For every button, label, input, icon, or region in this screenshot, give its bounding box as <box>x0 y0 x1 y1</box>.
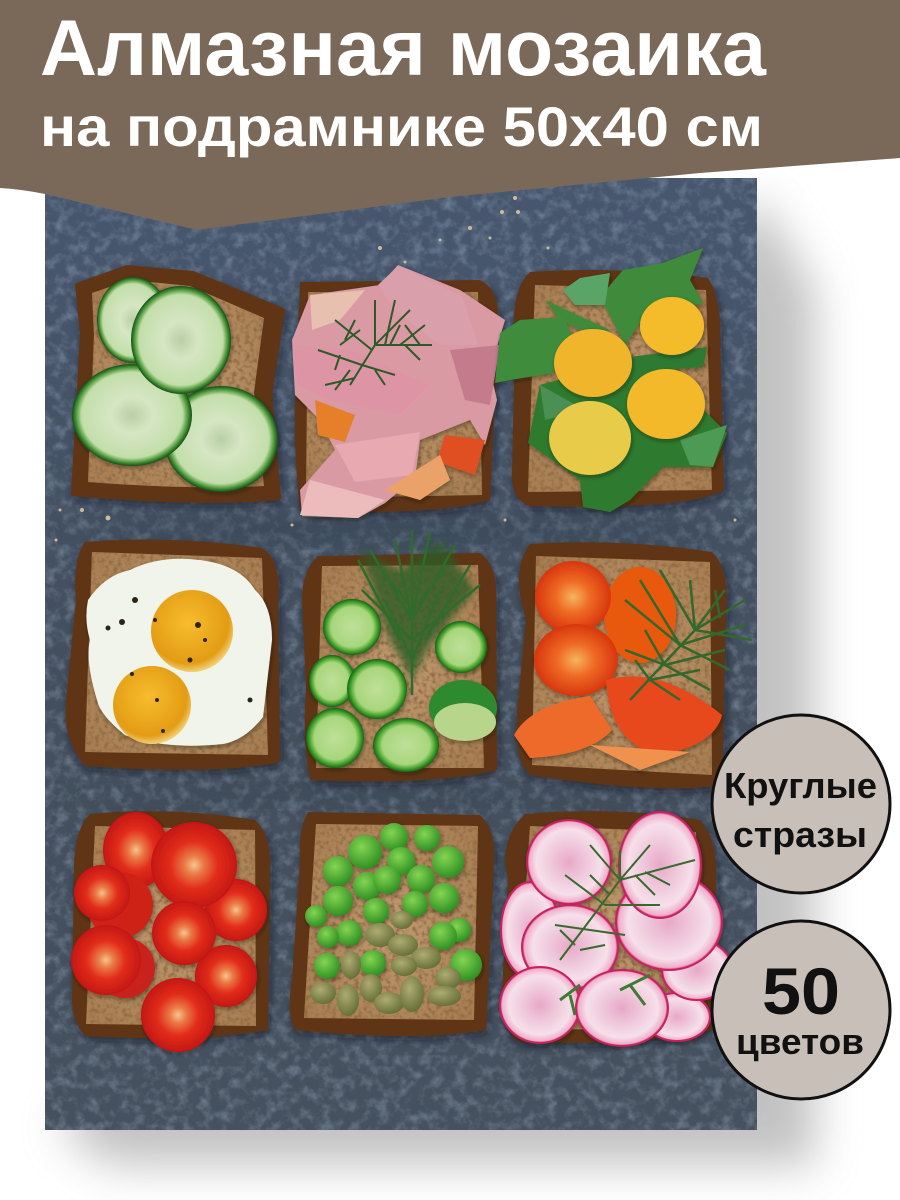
radish slices <box>500 812 732 1046</box>
canvas: slate background <box>45 178 757 1130</box>
badge: round rhinestones: Круглые <box>724 765 877 806</box>
egg yolks <box>106 590 252 744</box>
peas <box>305 823 482 981</box>
herb leaves <box>560 975 650 1015</box>
dill sprig <box>555 845 695 960</box>
tomato pieces <box>514 561 722 770</box>
dill sprig <box>358 530 480 695</box>
tomatoes <box>71 812 267 1052</box>
cucumber slices <box>306 599 497 772</box>
toast 1: cucumber <box>72 267 283 501</box>
toast 3: greens and egg <box>495 248 727 512</box>
title: Алмазная мозаика <box>40 3 767 92</box>
toast 9: radish <box>500 811 732 1046</box>
toast 2: ham and dill <box>292 265 505 518</box>
toast 8: peas and capers <box>290 812 494 1036</box>
badge: 50 colours: цветов <box>736 1021 864 1062</box>
egg white <box>86 559 272 746</box>
toast 7: cherry tomatoes <box>71 811 270 1052</box>
toast 6: tomatoes and dill <box>514 542 752 788</box>
badge: 50 colours <box>712 921 890 1099</box>
badge: 50 colours: 50 <box>762 954 840 1028</box>
badge: round rhinestones: стразы <box>733 814 867 855</box>
dill sprig <box>625 570 752 700</box>
cucumber slices <box>72 277 278 492</box>
toast 4: fried eggs <box>65 540 280 770</box>
header banner <box>0 0 900 230</box>
canvas shadow <box>60 195 815 1165</box>
subtitle: на подрамнике 50х40 см <box>40 95 763 158</box>
salad leaves <box>495 248 727 512</box>
ham <box>292 265 505 518</box>
badge: round rhinestones <box>712 715 890 893</box>
egg yolks <box>549 297 705 475</box>
capers <box>310 911 461 1016</box>
dill sprig <box>318 300 432 390</box>
toast 5: cucumber and dill <box>302 530 497 781</box>
